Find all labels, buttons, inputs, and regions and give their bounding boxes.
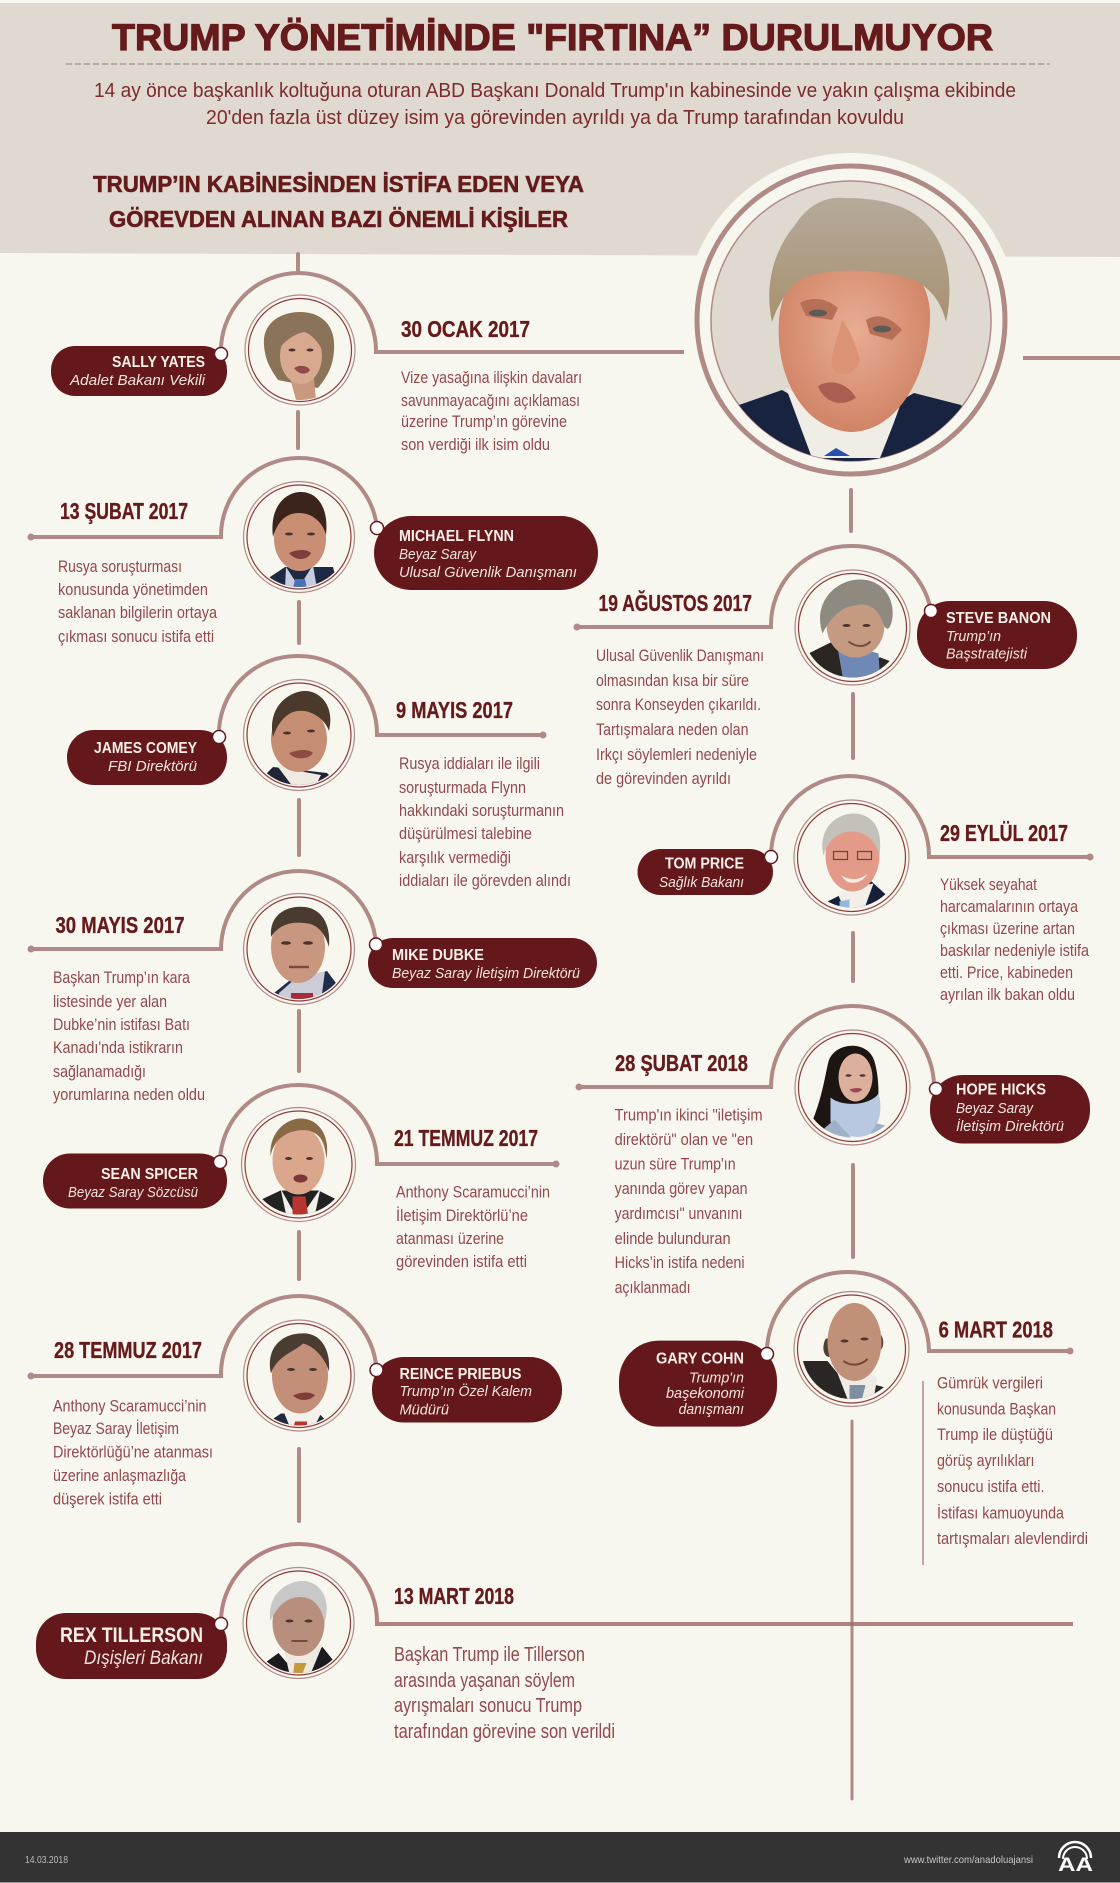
date: 21 TEMMUZ 2017	[394, 1125, 538, 1151]
connector arc	[31, 458, 377, 537]
date: 28 TEMMUZ 2017	[54, 1337, 202, 1363]
entry: Reince Priebus: REINCE PRIEBUS	[400, 1366, 522, 1383]
section heading	[93, 171, 584, 232]
description: yanında görev yapan	[615, 1179, 748, 1198]
description: açıklanmadı	[615, 1278, 691, 1297]
connector arc	[219, 656, 543, 737]
entry: Gary Cohn	[619, 1272, 1088, 1565]
entry: Gary Cohn: GARY COHN	[656, 1351, 744, 1368]
description: Yüksek seyahat	[940, 875, 1037, 894]
right vertical line to footer	[850, 1421, 854, 1799]
date: 19 AĞUSTOS 2017	[598, 589, 752, 616]
date: 13 ŞUBAT 2017	[60, 498, 188, 524]
description: üzerine anlaşmazlığa	[53, 1466, 186, 1485]
portrait	[244, 1320, 354, 1436]
description: iddiaları ile görevden alındı	[399, 871, 571, 890]
entry: Rex Tillerson: Dışişleri Bakanı	[84, 1648, 203, 1669]
description: Trump ile düştüğü	[937, 1425, 1053, 1444]
entry: Gary Cohn: danışmanı	[679, 1401, 744, 1418]
description: ayrılan ilk bakan oldu	[940, 985, 1075, 1004]
entry: Sean Spicer: SEAN SPICER	[101, 1166, 198, 1183]
description: konusunda yönetimden	[58, 580, 208, 599]
description: Başkan Trump ile Tillerson	[394, 1644, 585, 1666]
description: de görevinden ayrıldı	[596, 769, 731, 788]
entry: Sean Spicer	[43, 1085, 560, 1271]
connector arc	[771, 776, 1090, 857]
description: İstifası kamuoyunda	[937, 1504, 1064, 1522]
description: karşılık vermediği	[399, 848, 511, 867]
description: görevinden istifa etti	[396, 1252, 527, 1271]
description: çıkması sonucu istifa etti	[58, 627, 214, 646]
name pill	[51, 346, 227, 396]
name pill	[372, 1357, 562, 1422]
description: son verdiği ilk isim oldu	[401, 435, 550, 454]
name pill	[619, 1341, 777, 1427]
description: Başkan Trump’ın kara	[53, 968, 190, 987]
description: arasında yaşanan söylem	[394, 1670, 575, 1692]
portrait	[795, 570, 910, 688]
portrait	[244, 680, 354, 795]
description: Ulusal Güvenlik Danışmanı	[596, 646, 764, 665]
portrait	[794, 800, 909, 918]
description: çıkması üzerine artan	[940, 919, 1075, 938]
entry: Tom Price: TOM PRICE	[665, 856, 744, 873]
description: görüş ayrılıkları	[937, 1451, 1034, 1470]
description: yorumlarına neden oldu	[53, 1085, 205, 1104]
description: tartışmaları alevlendirdi	[937, 1529, 1088, 1548]
date: 30 MAYIS 2017	[56, 912, 184, 938]
description: yardımcısı" unvanını	[615, 1204, 743, 1223]
description: saklanan bilgilerin ortaya	[58, 603, 217, 622]
description: Kanadı'nda istikrarın	[53, 1038, 183, 1057]
description: Gümrük vergileri	[937, 1374, 1043, 1392]
name pill	[917, 601, 1077, 669]
entry: Sean Spicer: Beyaz Saray Sözcüsü	[68, 1184, 199, 1201]
description: sonra Konseyden çıkarıldı.	[596, 695, 761, 714]
description: Tartışmalara neden olan	[596, 720, 748, 739]
description: Rusya soruşturması	[58, 557, 182, 576]
description: olmasından kısa bir süre	[596, 671, 749, 690]
portrait	[795, 1030, 910, 1148]
connector arc	[221, 1544, 1073, 1624]
description: sonucu istifa etti.	[937, 1477, 1044, 1496]
section heading: TRUMP’IN KABİNESİNDEN İSTİFA EDEN VEYA	[93, 171, 584, 197]
description: düşürülmesi talebine	[399, 824, 532, 843]
logo: Anadolu Agency	[1058, 1842, 1093, 1876]
name pill	[930, 1075, 1090, 1144]
connector arc	[767, 1272, 1070, 1354]
portrait	[794, 1292, 909, 1409]
entry: Steve Banon: Başstratejisti	[946, 646, 1028, 663]
description: konusunda Başkan	[937, 1400, 1056, 1418]
entry: Michael Flynn	[28, 458, 598, 646]
description	[53, 1396, 213, 1508]
description: harcamalarının ortaya	[940, 897, 1078, 916]
name pill	[368, 938, 597, 988]
entry: Michael Flynn: MICHAEL FLYNN	[399, 528, 514, 545]
description: üzerine Trump’ın görevine	[401, 412, 567, 431]
name pill	[638, 849, 773, 895]
entry: Steve Banon	[574, 546, 1077, 788]
entry: James Comey	[67, 656, 571, 890]
entry: Tom Price: Sağlık Bakanı	[659, 874, 744, 891]
description	[394, 1644, 615, 1743]
entry: Mike Dubke: Beyaz Saray İletişim Direktörü	[392, 965, 581, 982]
entry: Steve Banon: Trump’ın	[946, 628, 1001, 645]
description	[401, 368, 582, 454]
name pill	[43, 1154, 227, 1208]
portrait	[244, 482, 354, 597]
description	[596, 646, 764, 788]
description: sağlanamadığı	[53, 1062, 146, 1081]
entry: Hope Hicks: İletişim Direktörü	[956, 1118, 1065, 1135]
date: 6 MART 2018	[939, 1316, 1053, 1342]
description: Trump'ın ikinci "iletişim	[615, 1106, 763, 1124]
intro text: 20'den fazla üst düzey isim ya görevinden ayrıldı ya da Trump tarafından kovuldu	[206, 107, 904, 129]
title: TRUMP YÖNETİMİNDE "FIRTINA” DURULMUYOR	[112, 17, 993, 58]
entry: Gary Cohn: başekonomi	[666, 1385, 745, 1402]
connector arc	[577, 546, 931, 627]
description: uzun süre Trump'ın	[615, 1154, 736, 1174]
entry: Tom Price	[638, 776, 1094, 1004]
description	[58, 557, 217, 646]
header band	[0, 3, 1120, 257]
description	[940, 875, 1089, 1004]
description: Anthony Scaramucci’nin	[53, 1396, 206, 1415]
portrait	[244, 894, 354, 1009]
description: Direktörlüğü’ne atanması	[53, 1442, 213, 1462]
section heading: GÖREVDEN ALINAN BAZI ÖNEMLİ KİŞİLER	[109, 206, 568, 232]
entry: Hope Hicks	[576, 1006, 1090, 1297]
entry: Hope Hicks: Beyaz Saray	[956, 1100, 1034, 1117]
description: Dubke’nin istifası Batı	[53, 1015, 190, 1034]
entry: Mike Dubke: MIKE DUBKE	[392, 947, 484, 964]
name pill	[374, 516, 598, 590]
logo: Anadolu Agency: AA	[1058, 1855, 1093, 1876]
connector arc	[221, 273, 684, 354]
date: 9 MAYIS 2017	[396, 697, 513, 723]
description: düşerek istifa etti	[53, 1490, 162, 1508]
entry: Reince Priebus	[28, 1296, 562, 1508]
date: 29 EYLÜL 2017	[940, 820, 1068, 846]
entry: Mike Dubke	[28, 871, 597, 1104]
entry: Michael Flynn: Beyaz Saray	[399, 546, 477, 563]
portrait	[242, 1108, 356, 1224]
connector arc	[31, 1296, 376, 1376]
entry: Sally Yates: Adalet Bakanı Vekili	[69, 372, 206, 389]
social link: www.twitter.com/anadoluajansi	[903, 1854, 1033, 1866]
entry: Rex Tillerson	[36, 1544, 1073, 1743]
description: soruşturmada Flynn	[399, 778, 526, 797]
description: Rusya iddiaları ile ilgili	[399, 754, 540, 773]
description: İletişim Direktörlü’ne	[396, 1206, 528, 1225]
description	[399, 754, 571, 890]
description: listesinde yer alan	[53, 992, 167, 1011]
description: etti. Price, kabineden	[940, 963, 1073, 982]
portrait	[243, 1568, 354, 1683]
description: savunmayacağını açıklaması	[401, 391, 580, 410]
description	[615, 1106, 763, 1297]
entry: Hope Hicks: HOPE HICKS	[956, 1082, 1046, 1098]
portrait: Donald Trump	[684, 153, 1018, 487]
entry: Reince Priebus: Müdürü	[400, 1402, 450, 1419]
date: 13 MART 2018	[394, 1583, 514, 1609]
name pill	[36, 1613, 227, 1679]
connector arc	[579, 1006, 934, 1089]
entry: Reince Priebus: Trump’ın Özel Kalem	[400, 1382, 532, 1400]
description	[396, 1182, 550, 1271]
connector arc	[220, 1085, 556, 1164]
description: hakkındaki soruşturmanın	[399, 801, 564, 820]
intro text	[94, 80, 1016, 129]
entry: James Comey: JAMES COMEY	[94, 740, 198, 757]
description: baskılar nedeniyle istifa	[940, 941, 1089, 960]
entry: Sally Yates	[51, 273, 684, 454]
date: 28 ŞUBAT 2018	[615, 1050, 748, 1076]
description: Anthony Scaramucci’nin	[396, 1182, 550, 1202]
description: Beyaz Saray İletişim	[53, 1419, 179, 1438]
description: direktörü" olan ve "en	[615, 1130, 753, 1149]
description: Vize yasağına ilişkin davaları	[401, 368, 582, 387]
footer bar	[0, 1832, 1120, 1883]
entry: Steve Banon: STEVE BANON	[946, 610, 1051, 627]
description: tarafından görevine son verildi	[394, 1721, 615, 1743]
date: 30 OCAK 2017	[401, 316, 530, 342]
intro text: 14 ay önce başkanlık koltuğuna oturan ABD Başkanı Donald Trump'ın kabinesinde ve yakın çalışma ekibinde	[94, 80, 1016, 102]
description: atanması üzerine	[396, 1229, 504, 1248]
description	[937, 1374, 1088, 1548]
description: elinde bulunduran	[615, 1229, 731, 1248]
description: Hicks’in istifa nedeni	[615, 1253, 745, 1272]
portrait	[245, 295, 355, 405]
entry: Michael Flynn: Ulusal Güvenlik Danışmanı	[399, 564, 577, 581]
date stamp: 14.03.2018	[25, 1855, 68, 1866]
entry: Rex Tillerson: REX TILLERSON	[60, 1624, 203, 1647]
name pill	[67, 730, 227, 785]
entry: James Comey: FBI Direktörü	[108, 758, 198, 775]
connector arc	[31, 871, 376, 949]
description: ayrışmaları sonucu Trump	[394, 1695, 582, 1717]
description	[53, 968, 205, 1104]
timeline stub: top left	[296, 254, 300, 273]
description: Irkçı söylemleri nedeniyle	[596, 745, 757, 764]
entry: Sally Yates: SALLY YATES	[112, 354, 205, 371]
entry: Gary Cohn: Trump'ın	[689, 1370, 744, 1387]
